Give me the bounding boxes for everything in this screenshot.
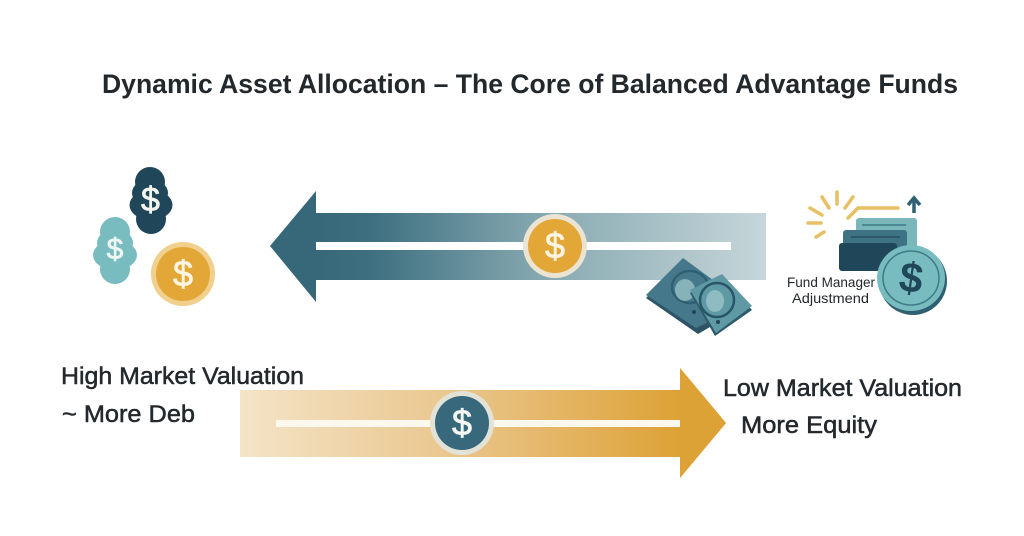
left label: high market valuation: ~ More Deb bbox=[62, 401, 195, 428]
label: fund manager adjustment: Fund Manager bbox=[787, 274, 875, 290]
right label: low market valuation: More Equity bbox=[741, 412, 877, 439]
icon: banknotes bbox=[646, 258, 752, 336]
icon: gold coin: $ bbox=[173, 253, 193, 294]
icon: gold coin on teal arrow: $ bbox=[545, 225, 565, 266]
left label: high market valuation: High Market Valuation bbox=[61, 363, 304, 390]
icon: gold coin on teal arrow bbox=[523, 214, 587, 278]
teal arrow pointing left bbox=[270, 191, 766, 302]
icon: light teal blob with dollar: $ bbox=[107, 233, 124, 266]
right label: low market valuation: Low Market Valuation bbox=[723, 375, 962, 402]
icon: fund manager adjustment bbox=[787, 192, 947, 315]
gold arrow pointing right bbox=[240, 368, 726, 478]
icon: teal coin on gold arrow: $ bbox=[452, 402, 472, 443]
icon: teal dollar coin bbox=[877, 245, 947, 315]
label: fund manager adjustment bbox=[787, 274, 875, 306]
right label: low market valuation bbox=[723, 375, 962, 439]
icon: dark blob with dollar: $ bbox=[141, 181, 160, 219]
title: Dynamic Asset Allocation – The Core of Balanced Advantage Funds bbox=[102, 69, 958, 99]
label: fund manager adjustment: Adjustmend bbox=[792, 290, 869, 306]
icon: sun rays bbox=[808, 192, 898, 237]
icon: teal dollar coin: $ bbox=[896, 253, 926, 302]
icon: teal coin on gold arrow bbox=[430, 391, 494, 455]
icon: up arrow bbox=[908, 198, 920, 213]
icon: stacked cards bbox=[856, 218, 917, 258]
left label: high market valuation bbox=[61, 363, 304, 428]
icon: money cluster bbox=[93, 167, 215, 306]
